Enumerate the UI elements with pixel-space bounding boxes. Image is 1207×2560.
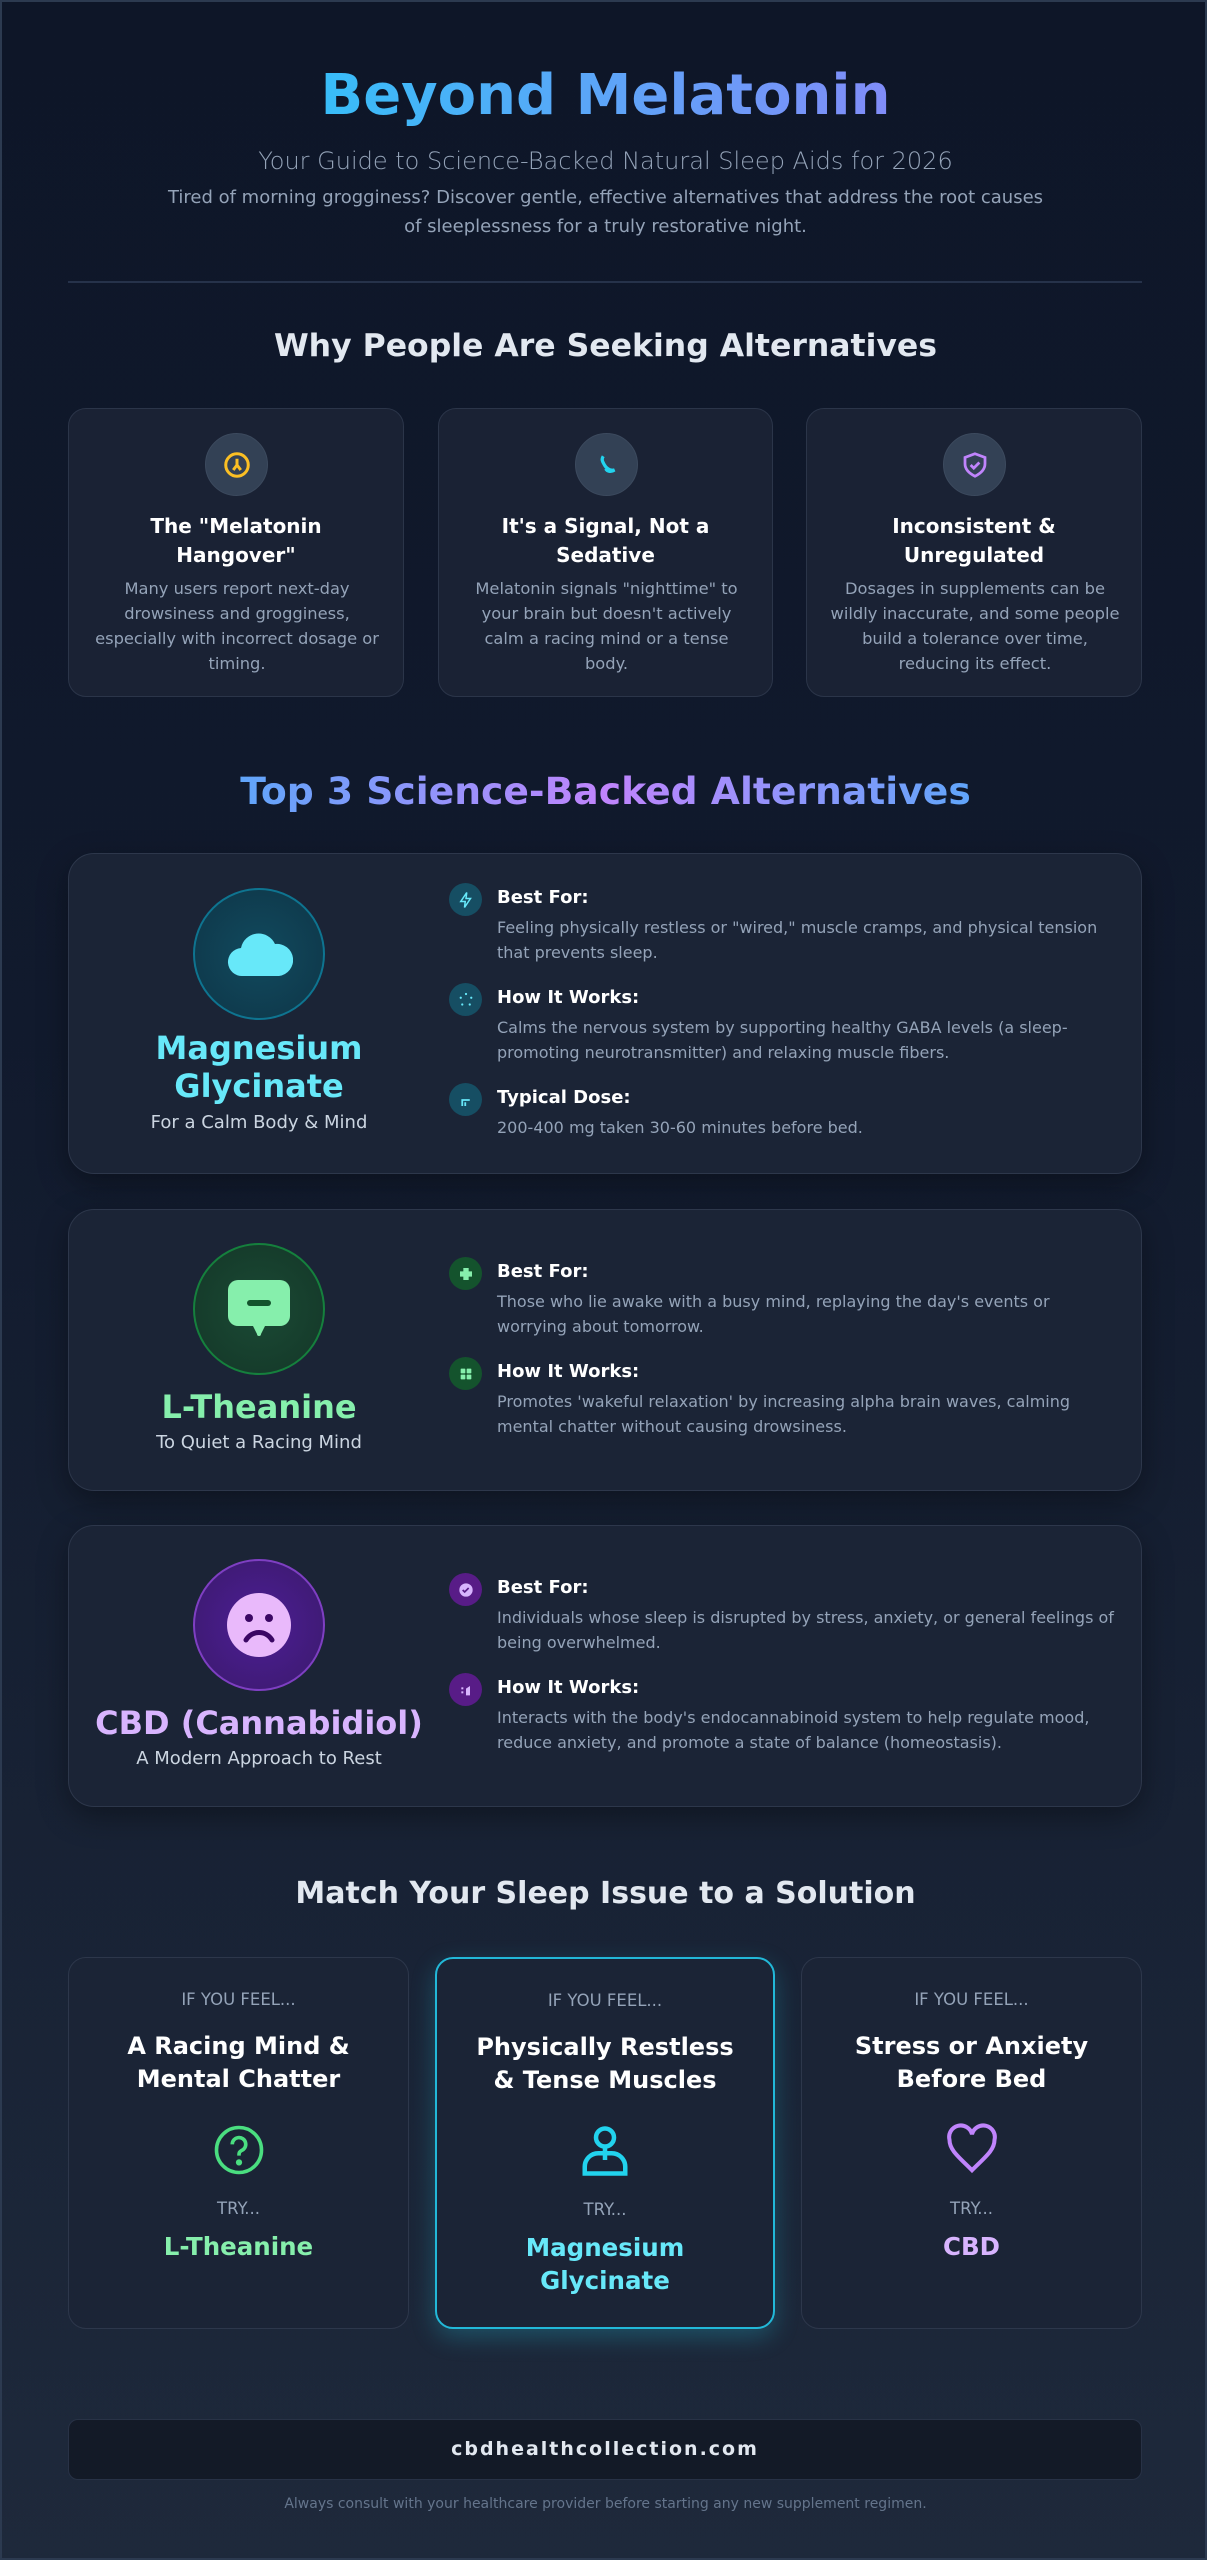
panel: signal: It's a Signal, Not a	[502, 514, 709, 538]
panel: restless: Glycinate	[540, 2266, 670, 2295]
panel: magnesium: Glycinate	[174, 1067, 344, 1105]
icon: clock	[205, 433, 268, 496]
panel: l-theanine: Promotes 'wakeful relaxation' by increasing alpha brain waves, calming mental chatter without causing drowsiness.	[497, 1392, 1070, 1436]
icon: question	[214, 2126, 264, 2174]
icon: shield	[943, 433, 1006, 496]
panel: stress: TRY...	[950, 2199, 993, 2218]
intro text	[168, 187, 1043, 237]
panel: stress: CBD	[943, 2232, 1000, 2261]
panel: magnesium: 200-400 mg taken 30-60 minutes before bed.	[497, 1118, 863, 1137]
panel: hangover	[68, 408, 404, 697]
panel: signal	[438, 408, 773, 697]
disclaimer: Always consult with your healthcare provider before starting any new supplement regimen.	[284, 2496, 927, 2512]
panel: signal: Sedative	[556, 543, 655, 567]
panel: racing mind: TRY...	[217, 2199, 260, 2218]
panel: magnesium: Magnesium	[156, 1029, 362, 1067]
footer: website: cbdhealthcollection.com	[451, 2438, 759, 2460]
panel: racing mind: L-Theanine	[164, 2232, 313, 2261]
panel: restless: & Tense Muscles	[493, 2066, 717, 2094]
icon: dose	[449, 1083, 482, 1116]
heading: top 3: Top 3 Science-Backed Alternatives	[240, 769, 971, 813]
panel: restless	[435, 1957, 775, 2329]
panel: l-theanine: To Quiet a Racing Mind	[156, 1432, 362, 1453]
panel: stress: Before Bed	[897, 2065, 1046, 2093]
panel: stress: IF YOU FEEL...	[914, 1990, 1029, 2009]
panel: hangover: The "Melatonin	[150, 514, 322, 538]
panel: stress	[801, 1957, 1142, 2329]
icon: moon	[575, 433, 638, 496]
panel: stress: Stress or Anxiety	[855, 2032, 1088, 2060]
icon: dots	[449, 983, 482, 1016]
panel: unregulated: Inconsistent &	[892, 514, 1056, 538]
panel: magnesium: Calms the nervous system by supporting healthy GABA levels (a sleep-promoting neurotransmitter) and relaxing muscle fibers.	[497, 1018, 1068, 1062]
panel: magnesium: Typical Dose:	[497, 1087, 631, 1108]
panel: racing mind: A Racing Mind &	[127, 2032, 350, 2060]
panel: restless: TRY...	[584, 2200, 626, 2219]
panel: magnesium: How It Works:	[497, 987, 639, 1008]
panel: l-theanine: Those who lie awake with a busy mind, replaying the day's events or worrying about tomorrow.	[497, 1292, 1050, 1336]
subtitle: Your Guide to Science-Backed Natural Sleep Aids for 2026	[258, 147, 953, 175]
icon: face	[193, 1559, 325, 1691]
title: Beyond Melatonin	[321, 63, 890, 128]
icon: message	[193, 1243, 325, 1375]
panel: l-theanine: Best For:	[497, 1261, 589, 1282]
panel: restless: Magnesium	[526, 2233, 684, 2262]
panel: cbd: How It Works:	[497, 1677, 639, 1698]
icon: puzzle	[449, 1257, 482, 1290]
panel: l-theanine: L-Theanine	[161, 1388, 357, 1426]
panel: magnesium: Feeling physically restless or "wired," muscle cramps, and physical tension that prevents sleep.	[497, 918, 1097, 962]
panel: unregulated: Unregulated	[904, 543, 1044, 567]
icon: cloud	[193, 888, 325, 1020]
heading: why: Why People Are Seeking Alternatives	[274, 328, 937, 364]
panel: unregulated: reducing its effect.	[899, 654, 1051, 673]
panel: l-theanine	[68, 1209, 1142, 1491]
icon: heart	[947, 2123, 997, 2173]
panel: magnesium	[68, 853, 1142, 1174]
panel: cbd: CBD (Cannabidiol)	[95, 1704, 423, 1742]
panel: cbd: Interacts with the body's endocannabinoid system to help regulate mood, reduce anxiety, and promote a state of balance (homeostasis).	[497, 1708, 1089, 1752]
panel: signal: Melatonin signals "nighttime" to your brain but doesn't actively calm a racing mind or a tense body.	[475, 579, 738, 673]
icon: check	[449, 1573, 482, 1606]
panel: cbd	[68, 1525, 1142, 1807]
icon: person	[582, 2126, 628, 2176]
panel: l-theanine: How It Works:	[497, 1361, 639, 1382]
panel: cbd: A Modern Approach to Rest	[136, 1748, 382, 1769]
icon: grid	[449, 1357, 482, 1390]
panel: unregulated: Dosages in supplements can be wildly inaccurate, and some people build a tolerance over time,	[830, 579, 1119, 648]
panel: restless: IF YOU FEEL...	[548, 1991, 662, 2010]
panel: hangover: Many users report next-day drowsiness and grogginess, especially with incorrect dosage or timing.	[95, 579, 379, 673]
panel: restless: Physically Restless	[476, 2033, 734, 2061]
panel: hangover: Hangover"	[176, 543, 296, 567]
icon: bolt	[449, 883, 482, 916]
panel: magnesium: Best For:	[497, 887, 589, 908]
heading: match: Match Your Sleep Issue to a Solution	[295, 1876, 916, 1911]
footer: website	[68, 2419, 1142, 2480]
panel: cbd: Best For:	[497, 1577, 589, 1598]
panel: racing mind: Mental Chatter	[137, 2065, 340, 2093]
panel: magnesium: For a Calm Body & Mind	[151, 1112, 367, 1133]
panel: unregulated	[806, 408, 1142, 697]
intro text: Tired of morning grogginess? Discover gentle, effective alternatives that address the root causes	[168, 187, 1043, 208]
panel: racing mind	[68, 1957, 409, 2329]
intro text: of sleeplessness for a truly restorative night.	[404, 216, 807, 237]
panel: racing mind: IF YOU FEEL...	[181, 1990, 296, 2009]
panel: cbd: Individuals whose sleep is disrupted by stress, anxiety, or general feelings of being overwhelmed.	[497, 1608, 1114, 1652]
icon: balance	[449, 1673, 482, 1706]
